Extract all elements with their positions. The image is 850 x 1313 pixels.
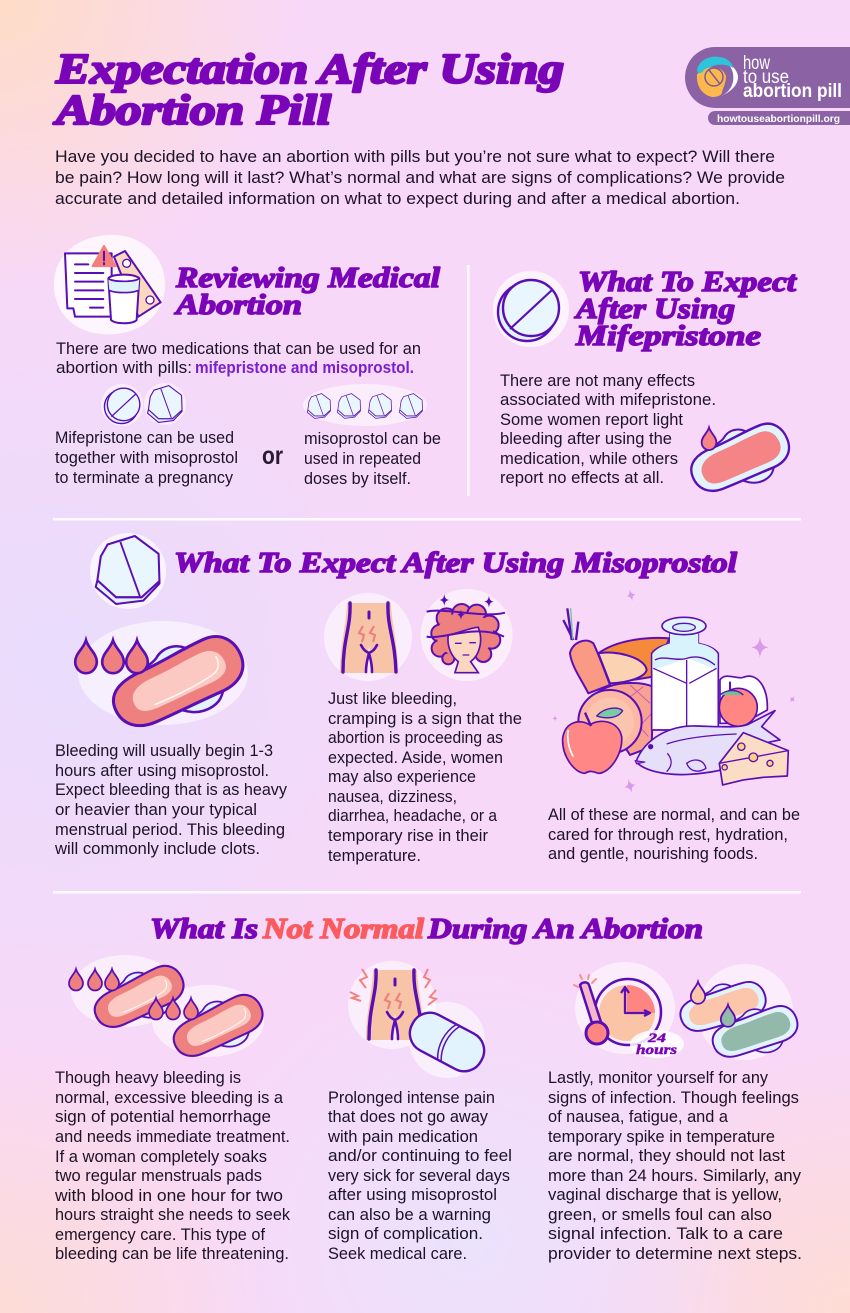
text: cramping: temporary rise in their: [328, 827, 489, 845]
intro text: be pain? How long will it last? What’s normal and what are signs of complications? We provide: [55, 168, 785, 187]
text: medication, while others: [500, 450, 678, 468]
heading: [174, 263, 440, 321]
icon: pad with three drops: [75, 621, 255, 744]
text: normal care: cared for through rest, hydration,: [548, 826, 788, 844]
text: bleeding: or heavier than your typical: [55, 801, 257, 819]
text: prolonged pain: with pain medication: [327, 1128, 478, 1146]
text: prolonged pain: Seek medical care.: [328, 1245, 467, 1263]
text: prolonged pain: sign of complication.: [328, 1225, 483, 1243]
text: excessive bleeding: [54, 1069, 291, 1263]
icon: pad with drop: [682, 413, 798, 505]
icon: torso with pain and capsule: [348, 961, 491, 1078]
text: bleeding: Bleeding will usually begin 1-3: [55, 742, 273, 760]
text: There are not many effects: [500, 372, 695, 390]
icon: nourishing foods: [552, 588, 797, 795]
text: cramping: Just like bleeding,: [328, 690, 457, 708]
icon: documents, warning, pills and water: [54, 235, 165, 334]
icon: logo pill mark: [697, 57, 738, 97]
text: cramping: [328, 690, 522, 865]
icon: discoloured pads: [675, 964, 804, 1067]
text: signs of infection: signs of infection. Though feelings: [548, 1089, 799, 1107]
panel: what is not normal: [54, 914, 804, 1263]
icon: misoprostol pill: [90, 533, 166, 609]
text: associated with mifepristone.: [500, 391, 716, 409]
heading: What To Expect After Using Misoprostol: [174, 548, 737, 579]
text: misoprostol alone: used in repeated: [304, 450, 421, 468]
text: signs of infection: signal infection. Talk to a care: [548, 1225, 783, 1243]
label: 24 hours: hours: [636, 1043, 678, 1058]
text: misoprostol alone: [304, 430, 441, 488]
text: normal care: [548, 806, 800, 863]
text: cramping: abortion is proceeding as: [328, 729, 503, 747]
title: [52, 47, 564, 134]
title: Abortion Pill: [52, 88, 331, 134]
panel: reviewing medical abortion: [54, 235, 441, 488]
heading: Reviewing Medical: [175, 263, 440, 294]
icon: thermometer and 24 hour clock: [574, 962, 684, 1058]
logo wordmark: abortion pill: [743, 81, 842, 102]
text: excessive bleeding: bleeding can be life threatening.: [55, 1245, 289, 1263]
text: prolonged pain: after using misoprostol: [328, 1186, 497, 1204]
text: bleeding after using the: [500, 430, 672, 448]
text: signs of infection: [548, 1069, 802, 1263]
text: prolonged pain: can also be a warning: [328, 1206, 491, 1224]
text: signs of infection: temporary spike in temperature: [548, 1128, 775, 1146]
text: two medications: abortion with pills:: [56, 359, 192, 377]
text: two medications: There are two medications that can be used for an: [56, 340, 421, 358]
text: prolonged pain: very sick for several days: [328, 1167, 510, 1185]
label: 24 hours: [636, 1030, 678, 1058]
text: prolonged pain: and/or continuing to feel: [328, 1147, 512, 1165]
text: signs of infection: more than 24 hours. Similarly, any: [548, 1167, 802, 1185]
text: prolonged pain: [327, 1089, 512, 1263]
icon: mifepristone pill: [493, 271, 569, 347]
intro text: accurate and detailed information on what to expect during and after a medical abortion.: [55, 189, 740, 208]
text: cramping: temperature.: [328, 847, 421, 865]
icons: four misoprostol pills: [303, 384, 427, 426]
logo wordmark: [743, 53, 842, 102]
text: mifepristone together: to terminate a pregnancy: [55, 469, 234, 487]
heading: What To Expect: [578, 267, 797, 298]
text: cramping: diarrhea, headache, or a: [328, 807, 498, 825]
icons: mifepristone and misoprostol pills: [101, 383, 186, 426]
text: misoprostol alone: misoprostol can be: [304, 430, 441, 448]
text: bleeding: Expect bleeding that is as heavy: [55, 781, 288, 799]
text: prolonged pain: Prolonged intense pain: [328, 1089, 495, 1107]
text: excessive bleeding: If a woman completely soaks: [55, 1148, 267, 1166]
text: normal care: and gentle, nourishing foods.: [548, 845, 758, 863]
icon: two pads with drops: [69, 955, 271, 1068]
label: 24 hours: 24: [647, 1030, 667, 1045]
text: excessive bleeding: with blood in one hour for two: [54, 1187, 283, 1205]
text: cramping: may also experience: [328, 768, 476, 786]
text: signs of infection: vaginal discharge that is yellow,: [548, 1186, 782, 1204]
heading: Mifepristone: [575, 321, 761, 352]
heading: Abortion: [174, 290, 302, 321]
text: mifepristone together: together with misoprostol: [55, 449, 238, 467]
text: [500, 372, 716, 487]
title: Expectation After Using: [55, 47, 564, 93]
heading: [150, 914, 703, 945]
text: cramping: expected. Aside, women: [328, 749, 503, 767]
text: excessive bleeding: emergency care. This type of: [55, 1226, 265, 1244]
text: excessive bleeding: sign of potential hemorrhage: [55, 1108, 271, 1126]
logo wordmark: to use: [743, 67, 789, 88]
text: signs of infection: green, or smells foul can also: [548, 1206, 772, 1224]
logo: howtouseabortionpill.org: [717, 114, 840, 125]
text: mifepristone together: [55, 429, 238, 487]
text: cramping: cramping is a sign that the: [328, 710, 522, 728]
heading: [574, 267, 797, 352]
text: bleeding: [54, 742, 288, 858]
text: excessive bleeding: hours straight she needs to seek: [55, 1206, 291, 1224]
icon: cramping torso: [324, 593, 412, 681]
text: excessive bleeding: and needs immediate treatment.: [55, 1128, 290, 1146]
panel: after misoprostol: [54, 533, 800, 865]
text: mifepristone together: Mifepristone can be used: [55, 429, 234, 447]
text: excessive bleeding: normal, excessive bleeding is a: [55, 1089, 284, 1107]
text: signs of infection: of nausea, fatigue, and a: [548, 1108, 729, 1126]
logo wordmark: how: [743, 53, 770, 74]
text: bleeding: hours after using misoprostol.: [55, 762, 269, 780]
text: report no effects at all.: [500, 469, 664, 487]
heading: During An Abortion: [427, 914, 703, 945]
heading: Not Normal: [262, 914, 424, 945]
text: normal care: All of these are normal, and can be: [548, 806, 800, 824]
text: prolonged pain: that does not go away: [328, 1108, 489, 1126]
text: two medications: [56, 340, 421, 377]
text: signs of infection: are normal, they should not last: [548, 1147, 785, 1165]
text: Some women report light: [500, 411, 683, 429]
intro text: Have you decided to have an abortion with pills but you’re not sure what to expect? Will there: [55, 147, 775, 166]
logo: [685, 47, 850, 125]
panel: after mifepristone: [493, 267, 798, 505]
heading: What Is: [150, 914, 258, 945]
heading: After Using: [574, 294, 735, 325]
text: signs of infection: provider to determine next steps.: [548, 1245, 802, 1263]
text: excessive bleeding: two regular menstruals pads: [55, 1167, 262, 1185]
text: bleeding: will commonly include clots.: [54, 840, 260, 858]
icon: dizzy head: [421, 589, 513, 681]
text: excessive bleeding: Though heavy bleeding is: [55, 1069, 241, 1087]
text: two medications: mifepristone and misoprostol.: [195, 359, 414, 377]
or label: or: [262, 442, 283, 470]
text: signs of infection: Lastly, monitor yourself for any: [548, 1069, 769, 1087]
text: cramping: nausea, dizziness,: [328, 788, 457, 806]
text: misoprostol alone: doses by itself.: [304, 470, 411, 488]
text: bleeding: menstrual period. This bleeding: [55, 821, 285, 839]
intro text: [55, 147, 785, 208]
